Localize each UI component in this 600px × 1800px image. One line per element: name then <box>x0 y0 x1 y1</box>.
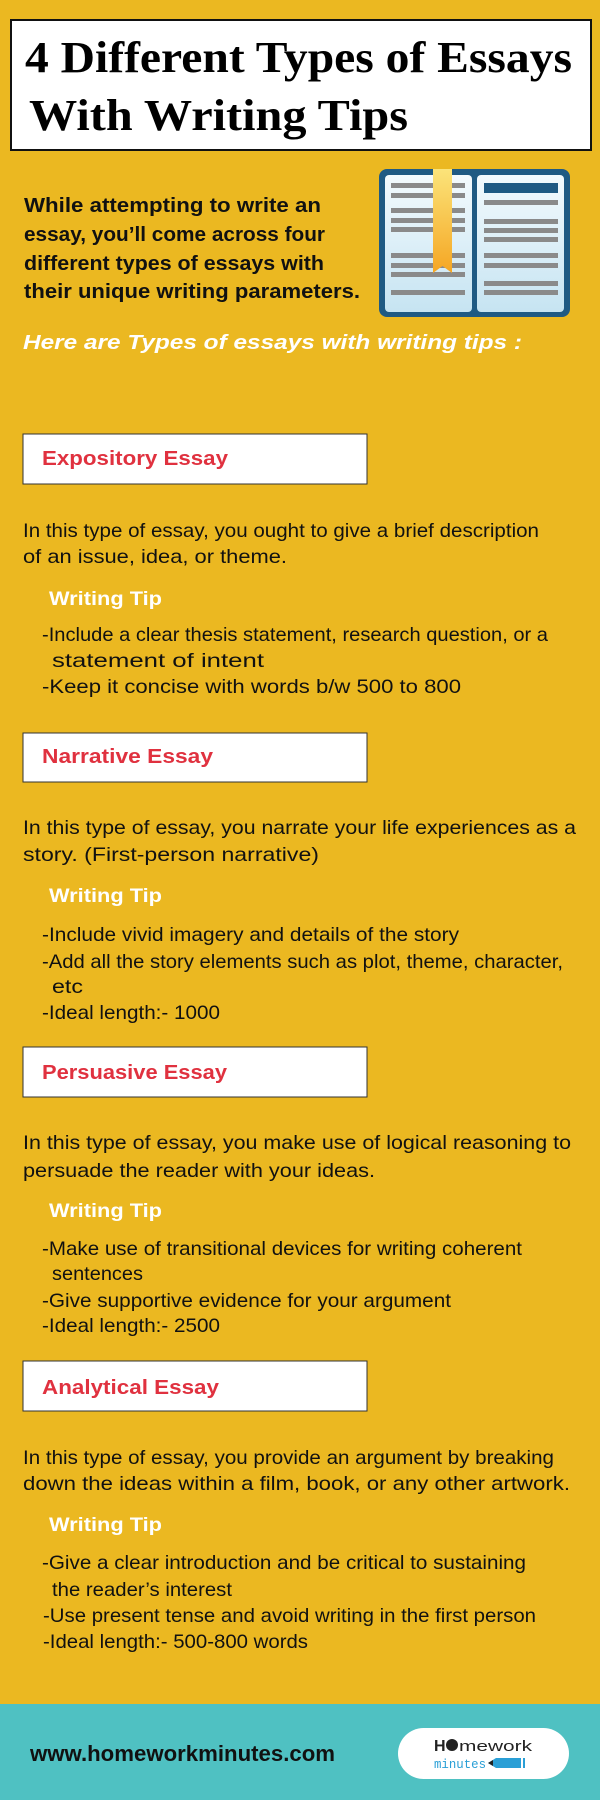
description: persuasive <box>23 1132 571 1182</box>
description: narrative <box>23 817 576 866</box>
writing tip: analytical: -Use present tense and avoid writing in the first person <box>43 1605 536 1627</box>
writing tip: analytical: -Give a clear introduction and be critical to sustaining <box>42 1552 526 1574</box>
description: analytical: In this type of essay, you provide an argument by breaking <box>23 1447 554 1469</box>
panel: expository essay <box>23 434 548 698</box>
description: expository <box>23 520 539 568</box>
heading box: analytical: Analytical Essay <box>42 1377 220 1399</box>
heading box: analytical <box>23 1361 367 1411</box>
writing tip: persuasive: -Make use of transitional devices for writing coherent <box>42 1238 523 1260</box>
writing tip: expository <box>42 589 548 698</box>
writing tip: narrative: -Include vivid imagery and details of the story <box>42 924 459 946</box>
heading box: persuasive: Persuasive Essay <box>42 1062 228 1084</box>
writing tip: persuasive <box>42 1201 523 1337</box>
writing tip: analytical <box>42 1515 536 1653</box>
writing tip: analytical: the reader’s interest <box>52 1579 233 1601</box>
description: expository: In this type of essay, you ought to give a brief description <box>23 520 539 542</box>
writing tip: narrative: Writing Tip <box>49 886 162 907</box>
writing tip: expository: statement of intent <box>52 650 265 672</box>
writing tip: analytical: -Ideal length:- 500-800 words <box>43 1631 308 1653</box>
heading box: narrative: Narrative Essay <box>42 746 214 768</box>
writing tip: expository: -Include a clear thesis statement, research question, or a <box>42 624 548 646</box>
writing tip: expository: -Keep it concise with words b/w 500 to 800 <box>42 676 461 698</box>
panel: narrative essay <box>23 733 576 1024</box>
logo: H <box>434 1738 446 1755</box>
intro text: their unique writing parameters. <box>24 281 360 303</box>
title: With Writing Tips <box>29 91 408 140</box>
heading box: persuasive <box>23 1047 367 1097</box>
intro text: different types of essays with <box>24 253 324 275</box>
writing tip: expository: Writing Tip <box>49 589 162 610</box>
writing tip: persuasive: -Ideal length:- 2500 <box>42 1315 220 1337</box>
description: narrative: story. (First-person narrative) <box>23 844 319 866</box>
logo: minutes <box>434 1757 486 1772</box>
writing tip: persuasive: -Give supportive evidence for your argument <box>42 1290 452 1312</box>
logo <box>398 1728 569 1779</box>
icon: open book <box>379 169 570 317</box>
writing tip: persuasive: sentences <box>52 1263 143 1285</box>
writing tip: analytical: Writing Tip <box>49 1515 162 1536</box>
footer url: www.homeworkminutes.com <box>29 1741 335 1766</box>
title <box>11 20 591 150</box>
logo: mework <box>459 1738 533 1755</box>
heading box: narrative <box>23 733 367 782</box>
heading box: expository: Expository Essay <box>42 448 229 470</box>
description: narrative: In this type of essay, you narrate your life experiences as a <box>23 817 576 839</box>
description: persuasive: persuade the reader with your ideas. <box>23 1160 375 1182</box>
description: persuasive: In this type of essay, you make use of logical reasoning to <box>23 1132 571 1154</box>
intro text <box>24 195 360 303</box>
description: expository: of an issue, idea, or theme. <box>23 546 287 568</box>
writing tip: persuasive: Writing Tip <box>49 1201 162 1222</box>
panel: persuasive essay <box>23 1047 571 1337</box>
footer <box>0 1704 600 1800</box>
intro text: While attempting to write an <box>24 195 321 217</box>
panel: analytical essay <box>23 1361 570 1653</box>
description: analytical <box>23 1447 570 1495</box>
subheading: Here are Types of essays with writing tips : <box>23 332 522 354</box>
heading box: expository <box>23 434 367 484</box>
intro text: essay, you’ll come across four <box>24 224 325 246</box>
writing tip: narrative: -Add all the story elements such as plot, theme, character, <box>42 951 563 973</box>
description: analytical: down the ideas within a film, book, or any other artwork. <box>23 1473 570 1495</box>
writing tip: narrative: -Ideal length:- 1000 <box>42 1002 220 1024</box>
title: 4 Different Types of Essays <box>25 33 572 82</box>
writing tip: narrative <box>42 886 563 1024</box>
writing tip: narrative: etc <box>52 976 83 998</box>
